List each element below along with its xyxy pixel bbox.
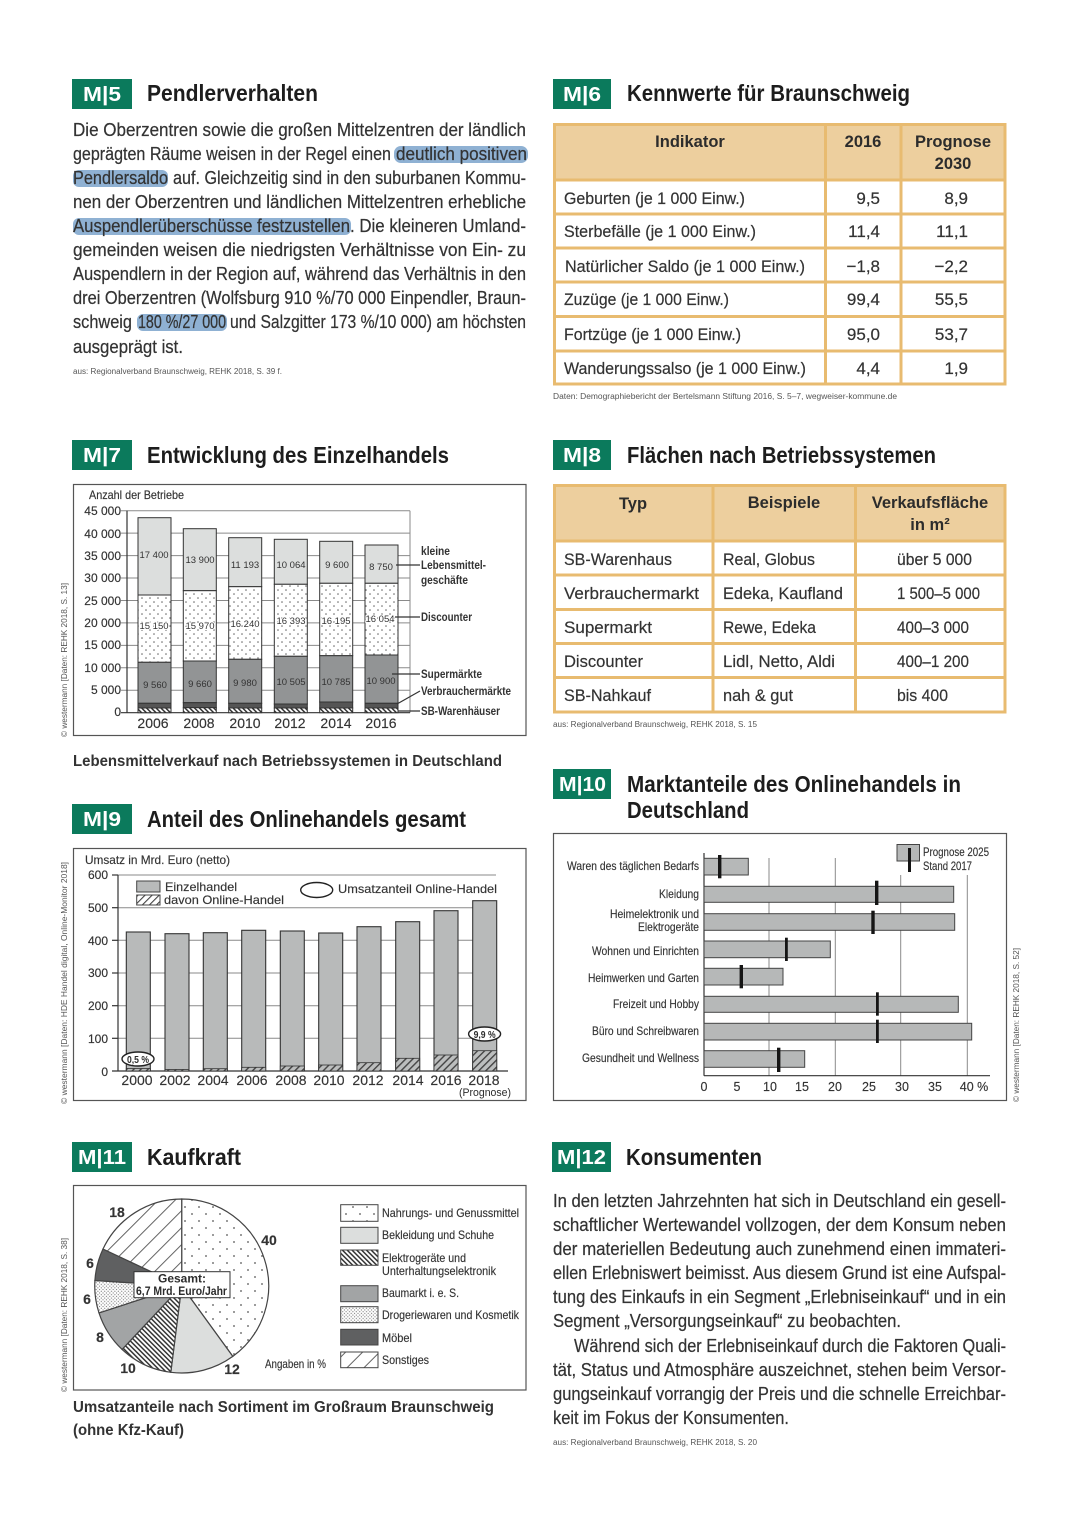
- heading M11: Kaufkraft: [147, 1144, 241, 1170]
- body text M5: auf. Gleichzeitig sind in den suburbanen Kommu-: [173, 168, 526, 188]
- bar chart M9: 200: [88, 999, 108, 1013]
- body text M5: schweig: [73, 312, 132, 332]
- legend M10: Prognose 2025: [923, 845, 989, 859]
- stacked bar chart M7: 40 000: [84, 527, 121, 541]
- heading M9: Anteil des Onlinehandels gesamt: [147, 806, 466, 832]
- table M8: Supermarkt: [564, 618, 652, 637]
- legend M9: davon Online-Handel: [164, 893, 284, 907]
- value labels: 9 600: [325, 560, 349, 571]
- bars M10: [704, 858, 972, 1067]
- table M6: Wanderungssalso (je 1 000 Einw.): [564, 359, 806, 378]
- highlights: [73, 146, 528, 331]
- legend M10: Stand 2017: [923, 859, 972, 873]
- callout 9,9 %: 9,9 %: [474, 1029, 496, 1041]
- source M12: aus: Regionalverband Braunschweig, REHK 2018, S. 20: [553, 1438, 758, 1447]
- table M8: Real, Globus: [723, 550, 815, 569]
- pie value labels: 6: [83, 1291, 91, 1307]
- bar chart M9: [74, 848, 526, 1100]
- value labels: 10 900: [366, 676, 396, 687]
- badge M5: [72, 79, 132, 109]
- stacked bar chart M7: 2012: [274, 715, 306, 731]
- body text M5: Auspendlerüberschüsse festzustellen: [73, 216, 350, 236]
- heading M7: Entwicklung des Einzelhandels: [147, 442, 449, 468]
- bar chart M9: 2008: [275, 1072, 307, 1088]
- value labels: 13 900: [185, 555, 215, 566]
- horizontal bar chart M10: 0: [701, 1080, 708, 1094]
- table M8: Verbrauchermarkt: [564, 584, 699, 603]
- value labels: 10 064: [276, 560, 306, 571]
- bar chart M9: 2016: [430, 1072, 462, 1088]
- body text M12: Während sich der Erlebniseinkauf durch die Faktoren Quali-: [574, 1336, 1006, 1356]
- bar chart M9: 2010: [313, 1072, 345, 1088]
- table M6: 2030: [935, 155, 971, 173]
- panel: M11 Kaufkraft: [60, 1142, 526, 1439]
- heading M10: Marktanteile des Onlinehandels in: [627, 771, 961, 797]
- table M8: in m²: [910, 516, 950, 534]
- heading M10: Deutschland: [627, 797, 749, 823]
- table M6: 11,4: [848, 222, 880, 241]
- bar chart M9: 300: [88, 966, 108, 980]
- body text M12: tung des Einkaufs in ein Segment „Erlebniseinkauf“ und in ein: [553, 1287, 1006, 1307]
- online share hatch: [126, 1051, 497, 1071]
- legend M11: Drogeriewaren und Kosmetik: [382, 1308, 520, 1322]
- credit M7: © westermann [Daten: REHK 2018, S. 13]: [60, 583, 69, 737]
- horizontal bar chart M10: 35: [928, 1080, 942, 1094]
- stacked bar chart M7: 2006: [137, 715, 169, 731]
- legend M11: Baumarkt i. e. S.: [382, 1286, 459, 1300]
- table M8: Rewe, Edeka: [723, 618, 816, 637]
- body text M12: tät, Status und Atmosphäre auszeichnet, stehen beim Versor-: [553, 1360, 1006, 1380]
- pie slices: [95, 1199, 269, 1373]
- value labels: 16 240: [230, 619, 260, 630]
- bar chart M9: 400: [88, 934, 108, 948]
- value labels: 16 054: [365, 614, 395, 625]
- stacked bar chart M7: Anzahl der Betriebe: [89, 488, 184, 502]
- horizontal bar chart M10: 30: [895, 1080, 909, 1094]
- body text M5: gemeinden weisen die niedrigsten Verhältnisse von Ein- zu: [73, 240, 526, 260]
- horizontal bar chart M10: 10: [763, 1080, 777, 1094]
- bar chart M9: 2012: [352, 1072, 384, 1088]
- badge M6: [553, 79, 611, 109]
- pie value labels: 10: [120, 1360, 136, 1376]
- table M6: [553, 123, 1006, 385]
- horizontal bar chart M10: 40 %: [960, 1080, 988, 1094]
- bar 2006: [138, 518, 171, 713]
- table M8: über 5 000: [897, 550, 972, 569]
- table M8: Typ: [619, 495, 647, 513]
- table M6: 53,7: [935, 325, 968, 344]
- bar chart M9: 2004: [197, 1072, 229, 1088]
- bar 2008: [183, 529, 216, 713]
- body text M5: Die Oberzentren sowie die großen Mittelzentren der ländlich: [73, 120, 526, 140]
- table M8: SB-Warenhaus: [564, 550, 672, 569]
- badge M10: [553, 769, 611, 799]
- body text M12: der materiellen Bedeutung auch zunehmend einen immateri-: [553, 1239, 1006, 1259]
- bar 2016: [365, 545, 398, 713]
- legend M11: Möbel: [382, 1331, 412, 1345]
- body text M5: Auspendlern in der Region auf, während das Verhältnis in den: [73, 264, 526, 284]
- stacked bar chart M7: [74, 484, 526, 736]
- stacked bar chart M7: 2014: [320, 715, 352, 731]
- badge M10: M|10: [559, 774, 606, 796]
- credit M9: © westermann [Daten: HDE Handel digital, Online-Monitor 2018]: [60, 862, 69, 1104]
- body text M12: keit im Fokus der Konsumenten.: [553, 1408, 789, 1428]
- table M8: bis 400: [897, 686, 948, 705]
- table M6: Fortzüge (je 1 000 Einw.): [564, 325, 741, 344]
- source M6: Daten: Demographiebericht der Bertelsmann Stiftung 2016, S. 5–7, wegweiser-kommune.de: [553, 392, 898, 401]
- table M8: Discounter: [564, 652, 643, 671]
- category labels: Elektrogeräte: [638, 920, 699, 934]
- category labels: Büro und Schreibwaren: [592, 1024, 699, 1038]
- body text M12: schaftlicher Wertewandel vollzogen, der dem Konsum neben: [553, 1215, 1006, 1235]
- table M6: Geburten (je 1 000 Einw.): [564, 189, 745, 208]
- badge M12: M|12: [557, 1147, 606, 1169]
- table M8: Lidl, Netto, Aldi: [723, 652, 835, 671]
- panel: M8 Flächen: [553, 440, 1006, 729]
- table M8: 400–3 000: [897, 618, 969, 637]
- horizontal bar chart M10: 15: [795, 1080, 809, 1094]
- bar chart M9: 2002: [159, 1072, 191, 1088]
- bar chart M9: 600: [88, 868, 108, 882]
- series labels: Discounter: [421, 612, 472, 624]
- pie value labels: 6: [86, 1255, 94, 1271]
- value labels: 11 193: [231, 560, 259, 571]
- legend M9: Einzelhandel: [165, 880, 237, 894]
- unit note: Angaben in %: [265, 1357, 326, 1371]
- caption M11: Umsatzanteile nach Sortiment im Großraum Braunschweig: [73, 1399, 494, 1416]
- stacked bar chart M7: 10 000: [84, 661, 121, 675]
- table M6: Natürlicher Saldo (je 1 000 Einw.): [565, 257, 805, 276]
- legend M11: Elektrogeräte und: [382, 1251, 466, 1265]
- total box: [134, 1272, 230, 1298]
- body text M5: 180 %/27 000: [138, 312, 226, 332]
- pie value labels: 8: [96, 1329, 104, 1345]
- body text M5: geprägten Räume weisen in der Regel einen: [73, 144, 391, 164]
- body text M12: ellen Erlebniswert beimisst. Aus diesem Grund ist eine Aufspal-: [553, 1263, 1006, 1283]
- table M8: 400–1 200: [897, 652, 969, 671]
- table M6: 2016: [845, 133, 881, 151]
- category labels: Waren des täglichen Bedarfs: [567, 859, 699, 873]
- horizontal bar chart M10: 5: [734, 1080, 741, 1094]
- stacked bar chart M7: 30 000: [84, 571, 121, 585]
- bar chart M9: 2000: [121, 1072, 153, 1088]
- series labels: SB-Warenhäuser: [421, 706, 500, 718]
- body text M5: nen der Oberzentren und ländlichen Mittelzentren erhebliche: [73, 192, 526, 212]
- credit M10: © westermann [Daten: REHK 2018, S. 52]: [1012, 948, 1021, 1102]
- panel: M10 Marktanteile: [553, 769, 1021, 1102]
- table M8: 1 500–5 000: [897, 584, 980, 603]
- value labels: 10 785: [321, 677, 351, 688]
- body text M5: ausgeprägt ist.: [73, 337, 183, 357]
- table M6: 95,0: [847, 325, 880, 344]
- legend M11: [341, 1205, 520, 1368]
- body text M5: deutlich positiven: [396, 144, 527, 164]
- horizontal bar chart M10: 25: [862, 1080, 876, 1094]
- table M6: 99,4: [847, 290, 880, 309]
- category labels: Kleidung: [659, 887, 699, 901]
- badge M8: M|8: [563, 445, 601, 467]
- bar 2014: [320, 541, 353, 713]
- stacked bar chart M7: 2010: [229, 715, 261, 731]
- legend M11: Bekleidung und Schuhe: [382, 1228, 494, 1242]
- badge M6: M|6: [563, 84, 601, 106]
- body text M12: gungseinkauf vorrangig der Preis und die schnelle Erreichbar-: [553, 1384, 1006, 1404]
- category labels: Wohnen und Einrichten: [592, 944, 699, 958]
- horizontal bar chart M10: [554, 834, 1006, 1100]
- stacked bar chart M7: 0: [114, 705, 121, 719]
- value labels: 9 660: [188, 679, 212, 690]
- panel: M7 Einzelhandel: [60, 440, 526, 770]
- stacked bar chart M7: 20 000: [84, 616, 121, 630]
- category labels: [567, 859, 699, 1065]
- badge M11: [72, 1142, 132, 1172]
- table M6: −2,2: [934, 257, 968, 276]
- table M8: [553, 484, 1006, 713]
- table M6: 11,1: [936, 222, 968, 241]
- stacked bar chart M7: 45 000: [84, 504, 121, 518]
- panel: M9 Onlinehandel: [60, 804, 526, 1104]
- table M6: Zuzüge (je 1 000 Einw.): [564, 290, 729, 309]
- bars: [126, 901, 497, 1071]
- bar chart M9: (Prognose): [459, 1087, 511, 1099]
- badge M11: M|11: [78, 1147, 126, 1169]
- value labels: 16 393: [276, 616, 306, 627]
- badge M5: M|5: [83, 84, 121, 106]
- bar chart M9: 2014: [392, 1072, 424, 1088]
- body text M5: drei Oberzentren (Wolfsburg 910 %/70 000 Einpendler, Braun-: [73, 288, 526, 308]
- leader lines: [392, 565, 420, 711]
- markers 2017: [718, 855, 879, 1072]
- value labels: 17 400: [139, 550, 169, 561]
- series labels: [421, 546, 511, 718]
- body text M5: . Die kleineren Umland-: [350, 216, 526, 236]
- badge M7: M|7: [83, 445, 121, 467]
- series labels: Lebensmittel-: [421, 560, 486, 572]
- category labels: Heimwerken und Garten: [588, 971, 699, 985]
- bar chart M9: 2006: [236, 1072, 268, 1088]
- category labels: Freizeit und Hobby: [613, 997, 699, 1011]
- stacked bar chart M7: 5 000: [91, 683, 121, 697]
- table M6: Prognose: [915, 133, 991, 151]
- value labels: 10 505: [276, 677, 306, 688]
- credit M11: © westermann [Daten: REHK 2018, S. 38]: [60, 1238, 69, 1392]
- heading M12: Konsumenten: [626, 1144, 762, 1170]
- body text M5: und Salzgitter 173 %/10 000) am höchsten: [230, 312, 526, 332]
- legend M9: [137, 880, 497, 907]
- horizontal bar chart M10: 20: [828, 1080, 842, 1094]
- stacked bar chart M7: 2016: [365, 715, 397, 731]
- category labels: Gesundheit und Wellness: [582, 1051, 699, 1065]
- body text M5: [73, 120, 527, 357]
- legend M10: [897, 844, 989, 873]
- table M6: 55,5: [935, 290, 968, 309]
- table M8: Verkaufsfläche: [872, 494, 988, 512]
- source M8: aus: Regionalverband Braunschweig, REHK 2018, S. 15: [553, 720, 758, 729]
- bar chart M9: 2018: [468, 1072, 500, 1088]
- table M8: Edeka, Kaufland: [723, 584, 843, 603]
- caption M11: [73, 1399, 494, 1439]
- value labels: 8 750: [369, 562, 393, 573]
- legend M11: Nahrungs- und Genussmittel: [382, 1206, 519, 1220]
- badge M9: M|9: [83, 809, 121, 831]
- series labels: geschäfte: [421, 575, 468, 587]
- body text M12: Segment „Versorgungseinkauf“ zu beobachten.: [553, 1311, 901, 1331]
- value labels: 9 980: [233, 678, 257, 689]
- table M6: Indikator: [655, 133, 725, 151]
- caption M11: (ohne Kfz-Kauf): [73, 1422, 184, 1439]
- total box: 6,7 Mrd. Euro/Jahr: [136, 1284, 227, 1298]
- pie value labels: 40: [261, 1232, 277, 1248]
- badge M12: [552, 1142, 611, 1172]
- value labels: 15 150: [139, 621, 169, 632]
- table M6: 8,9: [944, 189, 968, 208]
- stacked bar chart M7: 25 000: [84, 594, 121, 608]
- stacked bar chart M7: 2008: [183, 715, 215, 731]
- heading M6: Kennwerte für Braunschweig: [627, 80, 910, 106]
- bar chart M9: Umsatz in Mrd. Euro (netto): [85, 853, 230, 867]
- heading M10: [627, 771, 961, 823]
- badge M9: [72, 804, 132, 834]
- stacked bar chart M7: 35 000: [84, 549, 121, 563]
- table M6: −1,8: [846, 257, 880, 276]
- table M6: 9,5: [856, 189, 880, 208]
- panel: M5 Pendlerverhalten: [72, 79, 528, 376]
- body text M5: Pendlersaldo: [73, 168, 168, 188]
- pie chart M11: [74, 1186, 526, 1390]
- value labels: 9 560: [143, 680, 167, 691]
- pie value labels: 18: [109, 1204, 125, 1220]
- value labels: [139, 550, 396, 691]
- bar chart M9: 0: [101, 1065, 108, 1079]
- pie value labels: [83, 1204, 277, 1377]
- series labels: Verbrauchermärkte: [421, 686, 511, 698]
- legend M11: Sonstiges: [382, 1353, 429, 1367]
- source M5: aus: Regionalverband Braunschweig, REHK 2018, S. 39 f.: [73, 367, 282, 376]
- category labels: Heimelektronik und: [610, 907, 699, 921]
- badge M8: [553, 440, 611, 470]
- bar chart M9: 100: [88, 1032, 108, 1046]
- table M8: SB-Nahkauf: [564, 686, 651, 705]
- table M6: 1,9: [944, 359, 968, 378]
- body text M12: [553, 1191, 1006, 1428]
- bar chart M9: 500: [88, 901, 108, 915]
- legend M9: Umsatzanteil Online-Handel: [338, 882, 497, 896]
- caption M7: Lebensmittelverkauf nach Betriebssystemen in Deutschland: [73, 753, 502, 770]
- panel: M12 Konsumenten: [552, 1142, 1006, 1447]
- heading M8: Flächen nach Betriebssystemen: [627, 442, 936, 468]
- series labels: Supermärkte: [421, 669, 482, 681]
- legend M11: Unterhaltungselektronik: [382, 1264, 497, 1278]
- value labels: 16 195: [321, 616, 351, 627]
- bar 2012: [274, 539, 307, 713]
- value labels: 15 970: [185, 621, 215, 632]
- table M8: Beispiele: [748, 494, 820, 512]
- body text M12: In den letzten Jahrzehnten hat sich in Deutschland ein gesell-: [553, 1191, 1006, 1211]
- pie value labels: 12: [224, 1361, 240, 1377]
- heading M5: Pendlerverhalten: [147, 80, 318, 106]
- table M6: Sterbefälle (je 1 000 Einw.): [564, 222, 756, 241]
- callout 0,5 %: 0,5 %: [127, 1054, 150, 1066]
- total box: Gesamt:: [158, 1272, 206, 1286]
- bar 2010: [229, 538, 262, 713]
- stacked bar chart M7: 15 000: [84, 638, 121, 652]
- table M8: nah & gut: [723, 686, 793, 705]
- badge M7: [72, 440, 132, 470]
- table M6: 4,4: [856, 359, 880, 378]
- panel: M6 Kennwerte: [553, 79, 1006, 401]
- series labels: kleine: [421, 546, 450, 558]
